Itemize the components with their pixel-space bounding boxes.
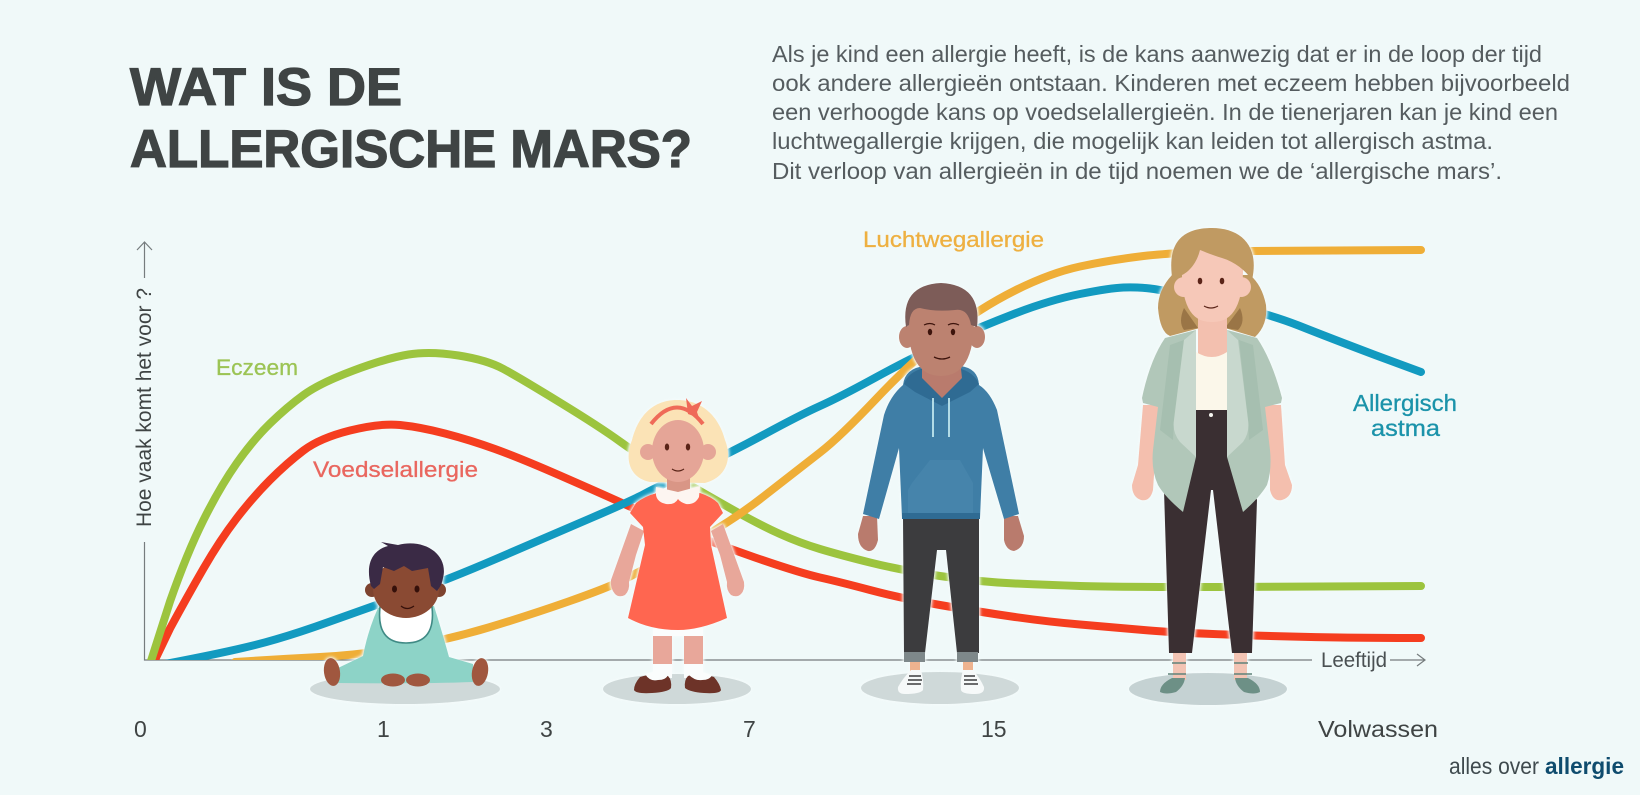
girl hair <box>629 400 728 483</box>
baby bib <box>380 607 432 643</box>
woman ankles <box>1173 650 1186 680</box>
x axis age labels: 3 <box>540 716 553 742</box>
boy brows <box>924 324 959 325</box>
label: allergisch astma: astma <box>1371 415 1440 441</box>
woman cardigan stripes <box>1160 340 1263 440</box>
boy ears <box>899 326 915 348</box>
girl shoes <box>634 674 671 693</box>
boy laces <box>907 676 978 684</box>
label: voedselallergie: Voedselallergie <box>313 457 478 482</box>
woman inner hair <box>1181 308 1243 330</box>
label: allergisch astma: Allergisch <box>1353 390 1457 416</box>
boy face <box>908 305 974 376</box>
boy hood inner <box>904 368 979 406</box>
woman button <box>1209 413 1213 417</box>
girl mouth <box>672 469 684 471</box>
boy shoes <box>898 670 923 694</box>
logo <box>1449 753 1624 779</box>
label: allergisch astma <box>1353 390 1457 441</box>
intro text block: Als je kind een allergie heeft, is de kans aanwezig dat er in de loop der tijd <box>772 41 1542 67</box>
figure: girl <box>603 398 751 704</box>
baby body <box>338 606 473 683</box>
baby shadow <box>310 674 500 704</box>
girl dress <box>628 493 727 630</box>
boy strings <box>933 398 949 437</box>
x axis age labels: 1 <box>377 716 390 742</box>
boy cuffs <box>904 652 925 662</box>
girl face <box>640 444 656 460</box>
woman mouth <box>1204 306 1218 308</box>
woman trousers <box>1164 410 1257 653</box>
intro text block: Dit verloop van allergieën in de tijd noemen we de ‘allergische mars’. <box>772 158 1502 184</box>
chart axes <box>137 242 1425 666</box>
boy trousers <box>903 518 979 653</box>
curve: voedselallergie <box>153 425 1421 664</box>
title <box>130 58 692 179</box>
intro text block: ook andere allergieën ontstaan. Kinderen met eczeem hebben bijvoorbeeld <box>772 70 1570 96</box>
woman cardigan <box>1142 330 1282 512</box>
woman straps <box>1168 663 1252 674</box>
woman face <box>1174 277 1194 297</box>
girl headband <box>651 408 703 424</box>
x axis label: Leeftijd <box>1321 649 1387 672</box>
boy eyes <box>928 329 932 335</box>
label: eczeem: Eczeem <box>216 355 298 380</box>
woman arms <box>1132 405 1160 500</box>
girl collar <box>656 486 700 504</box>
x axis age labels: 0 <box>134 716 147 742</box>
y axis label: Hoe vaak komt het voor ? <box>133 288 156 527</box>
girl bow <box>686 398 702 418</box>
girl socks <box>653 664 672 678</box>
intro text block: luchtwegallergie krijgen, die mogelijk kan leiden tot allergisch astma. <box>772 128 1493 154</box>
figure: woman <box>1129 228 1292 705</box>
curve: allergisch astma <box>165 287 1421 664</box>
woman neck <box>1198 318 1227 358</box>
curve: luchtwegallergie <box>235 250 1421 662</box>
woman eyes <box>1198 278 1202 284</box>
boy hoodie pocket <box>908 460 973 514</box>
girl eyes <box>665 444 669 450</box>
woman cardigan lapels <box>1174 330 1248 457</box>
boy neck <box>922 360 962 398</box>
baby hair <box>369 542 444 591</box>
intro text block <box>772 41 1570 184</box>
woman back hair <box>1158 275 1266 337</box>
x axis age labels: 7 <box>743 716 756 742</box>
girl white hem <box>653 628 703 636</box>
label: luchtwegallergie: Luchtwegallergie <box>863 227 1044 252</box>
girl neck <box>667 478 690 494</box>
title: WAT IS DE <box>130 58 402 117</box>
girl sock tops <box>645 671 668 680</box>
woman fringe <box>1171 228 1254 283</box>
curve: eczeem <box>150 353 1421 664</box>
boy hair <box>905 283 978 327</box>
x axis age labels: Volwassen <box>1318 716 1438 742</box>
baby eyes <box>392 586 397 592</box>
baby feet <box>322 657 490 687</box>
logo: allergie <box>1545 753 1624 779</box>
woman shadow <box>1129 673 1287 705</box>
woman shoes <box>1160 678 1185 694</box>
boy hands <box>858 516 878 551</box>
boy hoodie band <box>902 513 980 519</box>
boy shadow <box>861 672 1019 704</box>
girl legs <box>653 634 672 664</box>
baby head <box>365 583 379 597</box>
baby mouth <box>401 606 414 608</box>
boy mouth <box>934 357 950 359</box>
intro text block: een verhoogde kans op voedselallergieën. In de tienerjaren kan je kind een <box>772 99 1558 125</box>
girl shadow <box>603 674 751 704</box>
logo: alles over <box>1449 753 1539 779</box>
girl arms <box>611 524 644 596</box>
x axis age labels: 15 <box>981 716 1007 742</box>
boy ankles <box>910 660 920 672</box>
title: ALLERGISCHE MARS? <box>130 120 692 179</box>
figure: baby <box>310 542 500 704</box>
x axis age labels <box>134 716 1438 742</box>
boy hoodie <box>863 366 1019 519</box>
woman top <box>1196 352 1227 410</box>
figure: boy <box>858 283 1024 704</box>
